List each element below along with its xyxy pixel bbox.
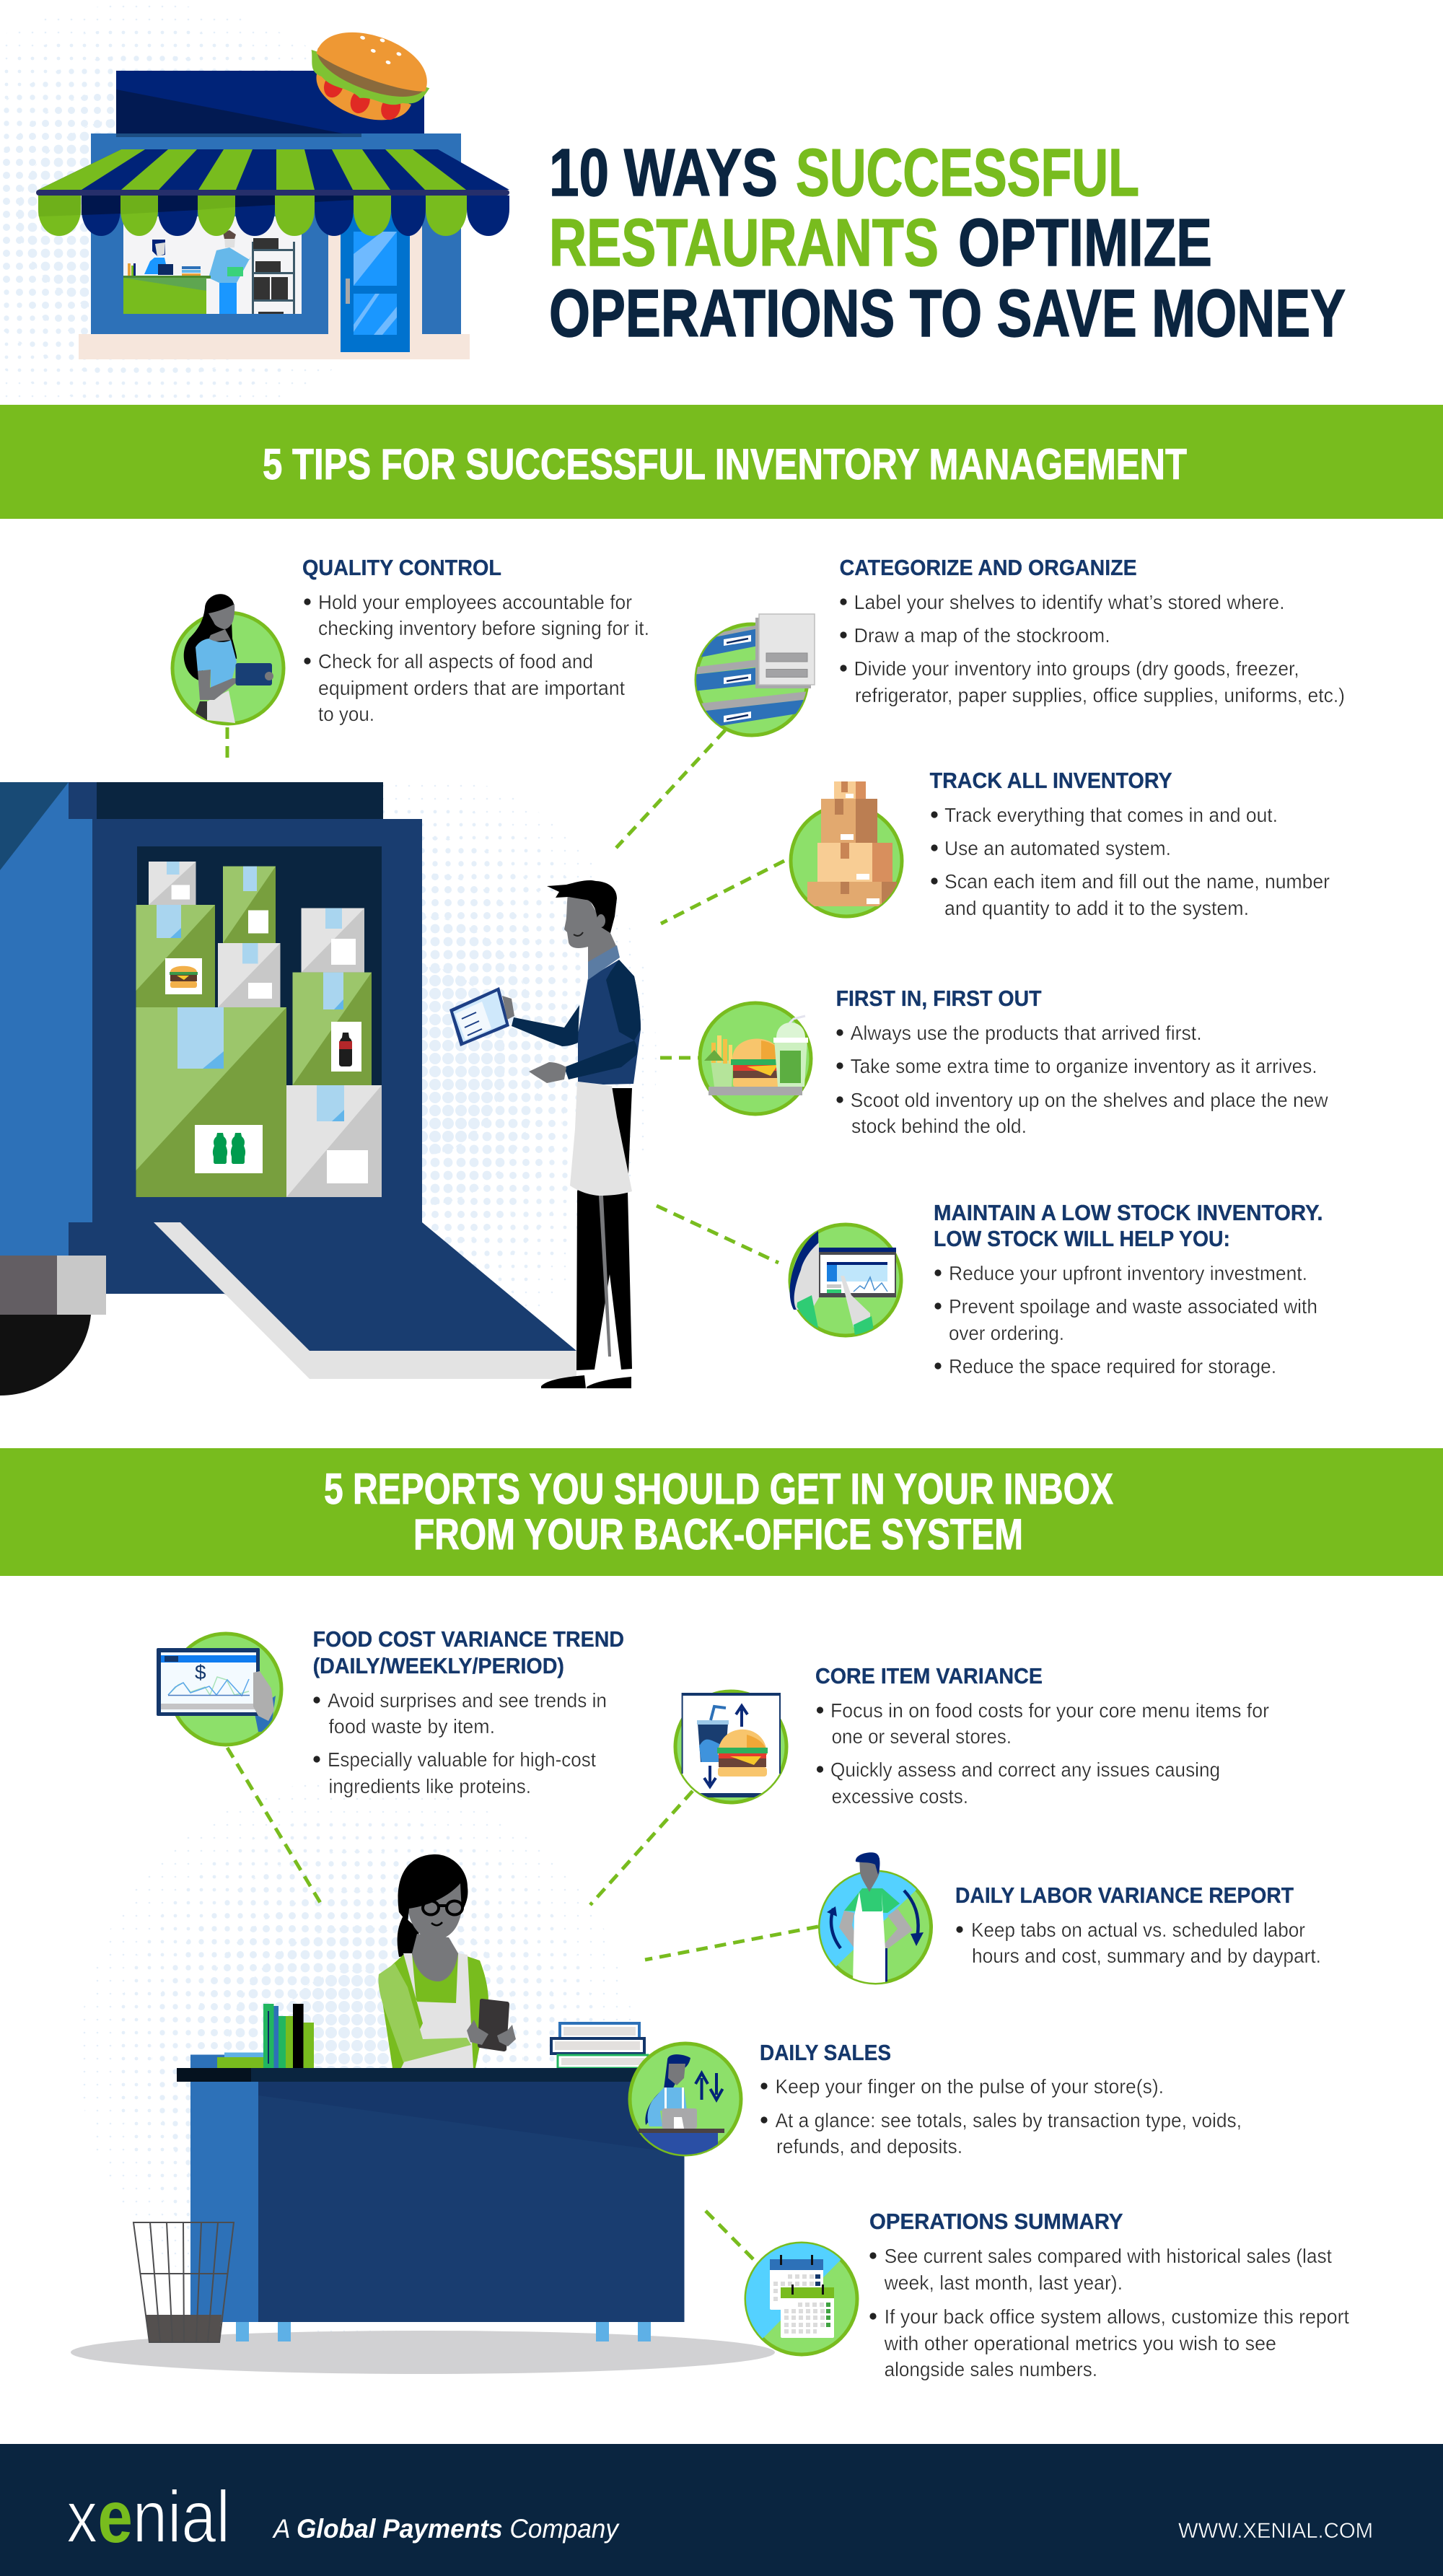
icon: fast food tray — [700, 1003, 811, 1114]
heading — [313, 1626, 624, 1678]
bullet list: Check for all aspects of food and — [318, 650, 593, 673]
connector: core item — [590, 1791, 693, 1905]
apron — [570, 1082, 632, 1196]
bullet list — [934, 1262, 1317, 1377]
bullet list — [817, 1699, 1269, 1808]
heading: DAILY LABOR VARIANCE REPORT — [955, 1883, 1294, 1908]
halftone background: top — [0, 4, 415, 429]
panel: food cost variance trend — [157, 1626, 624, 1797]
heading: CORE ITEM VARIANCE — [815, 1663, 1043, 1688]
illustration: wire trash basket — [133, 2222, 234, 2342]
bullet list: At a glance: see totals, sales by transaction type, voids, — [775, 2109, 1242, 2132]
panel: daily labor variance report — [815, 1852, 1321, 1992]
halftone background: counter — [79, 1779, 635, 2334]
bullet list: Focus in on food costs for your core menu items for — [830, 1699, 1269, 1722]
title: RESTAURANTS — [549, 205, 939, 280]
bullet list: week, last month, last year). — [884, 2271, 1123, 2294]
banner: reports — [0, 1448, 1443, 1576]
panel: quality control — [172, 555, 649, 725]
shirt — [379, 1953, 488, 2068]
illustration: woman behind counter — [378, 1854, 516, 2068]
hand — [529, 1062, 566, 1083]
heading: OPERATIONS SUMMARY — [869, 2209, 1123, 2234]
connector: categorize — [616, 730, 725, 848]
panel: categorize and organize — [693, 555, 1345, 735]
panel: first in, first out — [700, 986, 1328, 1137]
bullet list: Avoid surprises and see trends in — [328, 1689, 607, 1712]
connector: food cost — [227, 1748, 320, 1903]
bullet list: alongside sales numbers. — [885, 2358, 1097, 2380]
heading: DAILY SALES — [760, 2040, 891, 2065]
hair — [398, 1854, 468, 1923]
icon: cashier with arrows — [630, 2043, 741, 2162]
cargo boxes — [136, 862, 382, 1197]
awning — [36, 149, 509, 236]
bullet list — [840, 591, 1345, 706]
illustration: books — [190, 2004, 648, 2068]
panel: operations summary — [743, 2209, 1349, 2380]
banner: inventory tips: 5 TIPS FOR SUCCESSFUL INVENTORY MANAGEMENT — [263, 440, 1187, 489]
website: WWW.XENIAL.COM — [1178, 2519, 1373, 2543]
icon: hands on tablet report — [790, 1225, 901, 1342]
title — [549, 135, 1346, 351]
smile — [431, 1922, 442, 1925]
bullet list: and quantity to add it to the system. — [944, 897, 1249, 919]
bullet list — [956, 1919, 1321, 1967]
tablet — [449, 987, 514, 1046]
bullet list: stock behind the old. — [851, 1115, 1027, 1137]
ponytail — [398, 1916, 421, 1957]
banner: reports: 5 REPORTS YOU SHOULD GET IN YOUR INBOX — [324, 1465, 1113, 1513]
bullet list: Draw a map of the stockroom. — [854, 624, 1110, 647]
bullet list: excessive costs. — [832, 1785, 968, 1808]
bullet list — [304, 591, 649, 725]
connector: track — [661, 861, 784, 924]
bullet list: Keep your finger on the pulse of your store(s). — [775, 2075, 1164, 2098]
connector: quality control — [225, 727, 229, 762]
heading: QUALITY CONTROL — [302, 555, 501, 580]
door surround — [328, 214, 422, 337]
shoes — [541, 1375, 631, 1388]
tagline: A Global Payments Company — [272, 2514, 620, 2544]
connector: low stock — [657, 1206, 778, 1263]
bullet list: Scan each item and fill out the name, number — [944, 870, 1330, 893]
icon: woman with tablet — [172, 594, 284, 724]
icon: calendars — [743, 2237, 857, 2354]
sleeve — [378, 1963, 471, 2062]
heading: CATEGORIZE AND ORGANIZE — [840, 555, 1137, 580]
illustration: delivery truck — [0, 782, 576, 1396]
banner: inventory tips — [0, 405, 1443, 519]
illustration: waiter with tablet — [449, 880, 641, 1388]
bullet list — [931, 804, 1330, 919]
bullet list: one or several stores. — [832, 1725, 1012, 1748]
icon: cost up and down card — [675, 1691, 786, 1802]
window scene — [123, 216, 302, 314]
bullet list — [869, 2245, 1349, 2380]
bullet list: Reduce the space required for storage. — [949, 1355, 1276, 1377]
hands — [467, 2020, 488, 2045]
heading: LOW STOCK WILL HELP YOU: — [934, 1226, 1230, 1251]
bullet list: Use an automated system. — [944, 837, 1171, 859]
door — [341, 214, 410, 352]
bullet list: refunds, and deposits. — [776, 2135, 962, 2157]
bullet list: refrigerator, paper supplies, office supplies, uniforms, etc.) — [855, 684, 1345, 706]
title: SUCCESSFUL — [796, 135, 1139, 210]
logo: xenial — [66, 2476, 230, 2558]
banner: reports: FROM YOUR BACK-OFFICE SYSTEM — [413, 1510, 1023, 1559]
bullet list: checking inventory before signing for it. — [318, 617, 649, 639]
bullet list: Scoot old inventory up on the shelves and place the new — [851, 1089, 1328, 1111]
icon: report on screen: $ — [195, 1661, 206, 1683]
bullet list: Label your shelves to identify what’s stored where. — [854, 591, 1285, 613]
head — [564, 895, 617, 964]
halftone background: truck — [195, 776, 657, 1346]
trousers — [576, 1088, 632, 1370]
store wall — [91, 133, 461, 334]
bullet list: Hold your employees accountable for — [318, 591, 632, 613]
panel: maintain a low stock inventory — [790, 1200, 1323, 1377]
icon: stacked cartons — [791, 781, 902, 916]
panel: daily sales — [630, 2040, 1242, 2162]
bullet list: hours and cost, summary and by daypart. — [972, 1945, 1321, 1967]
heading: FIRST IN, FIRST OUT — [836, 986, 1042, 1011]
bullet list: ingredients like proteins. — [329, 1775, 531, 1797]
heading: TRACK ALL INVENTORY — [930, 768, 1172, 793]
floor shadow — [71, 2331, 775, 2374]
bullet list: equipment orders that are important — [318, 677, 625, 699]
heading: FOOD COST VARIANCE TREND — [313, 1626, 624, 1652]
bullet list — [836, 1022, 1328, 1137]
bullet list: Track everything that comes in and out. — [944, 804, 1278, 826]
bullet list: food waste by item. — [329, 1715, 495, 1738]
neck — [412, 1934, 458, 1981]
title: 10 WAYS — [549, 135, 778, 210]
bullet list — [760, 2075, 1242, 2157]
bullet list — [313, 1689, 607, 1797]
truck body — [0, 782, 576, 1396]
connector: first in first out — [660, 1056, 700, 1059]
sidewalk — [79, 334, 470, 359]
bullet list: Reduce your upfront inventory investment. — [949, 1262, 1307, 1284]
bullet list: over ordering. — [949, 1322, 1064, 1344]
bullet list: Always use the products that arrived first. — [851, 1022, 1202, 1044]
apron — [401, 1953, 473, 2068]
bullet list: Quickly assess and correct any issues causing — [830, 1758, 1220, 1781]
face — [408, 1882, 462, 1940]
icon: filing drawers and map — [693, 614, 815, 735]
heading: MAINTAIN A LOW STOCK INVENTORY. — [934, 1200, 1323, 1225]
bullet list: Keep tabs on actual vs. scheduled labor — [971, 1919, 1305, 1941]
bullet list: Especially valuable for high-cost — [328, 1748, 596, 1771]
glasses — [423, 1901, 462, 1915]
footer — [0, 2444, 1443, 2576]
bullet list: If your back office system allows, customize this report — [885, 2305, 1349, 2328]
heading — [934, 1200, 1323, 1251]
icon: man in apron with arrows — [818, 1852, 933, 1984]
bullet list: Prevent spoilage and waste associated with — [949, 1295, 1317, 1318]
bullet list: See current sales compared with historical sales (last — [885, 2245, 1332, 2267]
icon: report on screen — [157, 1634, 281, 1745]
heading: (DAILY/WEEKLY/PERIOD) — [313, 1653, 564, 1678]
tablet — [478, 1999, 509, 2051]
bullet list: Take some extra time to organize inventory as it arrives. — [851, 1055, 1317, 1077]
torso and sleeves — [578, 960, 641, 1085]
connector: labor — [645, 1927, 818, 1960]
bullet list: to you. — [318, 703, 374, 725]
store sign — [116, 71, 424, 137]
bullet list: with other operational metrics you wish to see — [884, 2332, 1276, 2354]
illustration: storefront — [36, 17, 509, 359]
panel: track all inventory — [791, 768, 1330, 919]
bullet list: Divide your inventory into groups (dry goods, freezer, — [854, 657, 1299, 680]
panel: core item variance — [675, 1663, 1269, 1808]
burger sign — [296, 17, 440, 136]
connector: operations — [706, 2211, 756, 2262]
illustration: counter — [177, 2068, 684, 2341]
title: OPTIMIZE — [958, 205, 1212, 280]
